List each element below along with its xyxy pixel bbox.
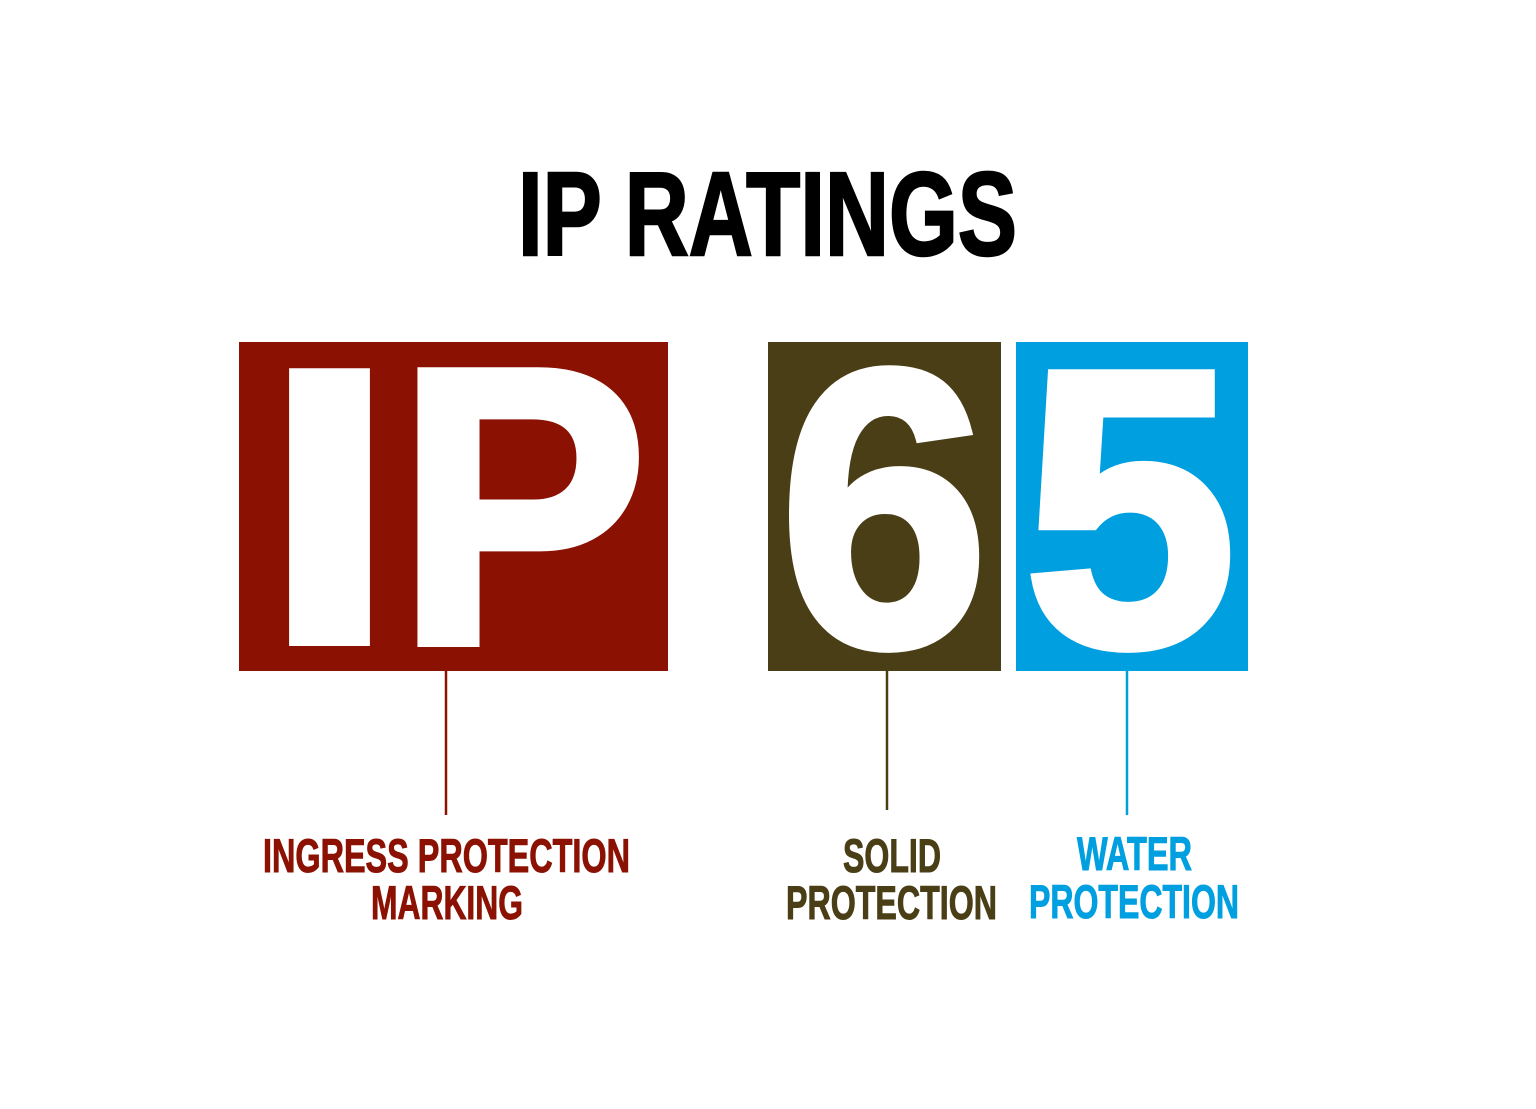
connector line: IP [445,671,447,815]
digit 5: 5 [1023,287,1237,729]
label: ingress protection marking: INGRESS PROTECTION [263,829,630,882]
label: water protection: PROTECTION [1029,875,1239,928]
label: water protection: WATER [1077,827,1192,880]
connector line: 6 [886,671,888,810]
connector line: 5 [1126,671,1128,815]
letters IP [259,285,648,727]
panel: IP box [239,285,668,727]
title: IP RATINGS [518,148,1017,281]
digit 6: 6 [779,287,989,729]
letters IP: P [396,285,648,727]
letters IP: I [259,285,400,727]
label: solid protection: PROTECTION [786,876,997,929]
label: solid protection [786,829,997,929]
label: ingress protection marking [263,829,630,929]
label: water protection [1029,827,1239,928]
panel: digit 5 box [1016,287,1248,729]
label: ingress protection marking: MARKING [371,876,523,929]
label: solid protection: SOLID [843,829,941,882]
panel: digit 6 box [768,287,1001,729]
